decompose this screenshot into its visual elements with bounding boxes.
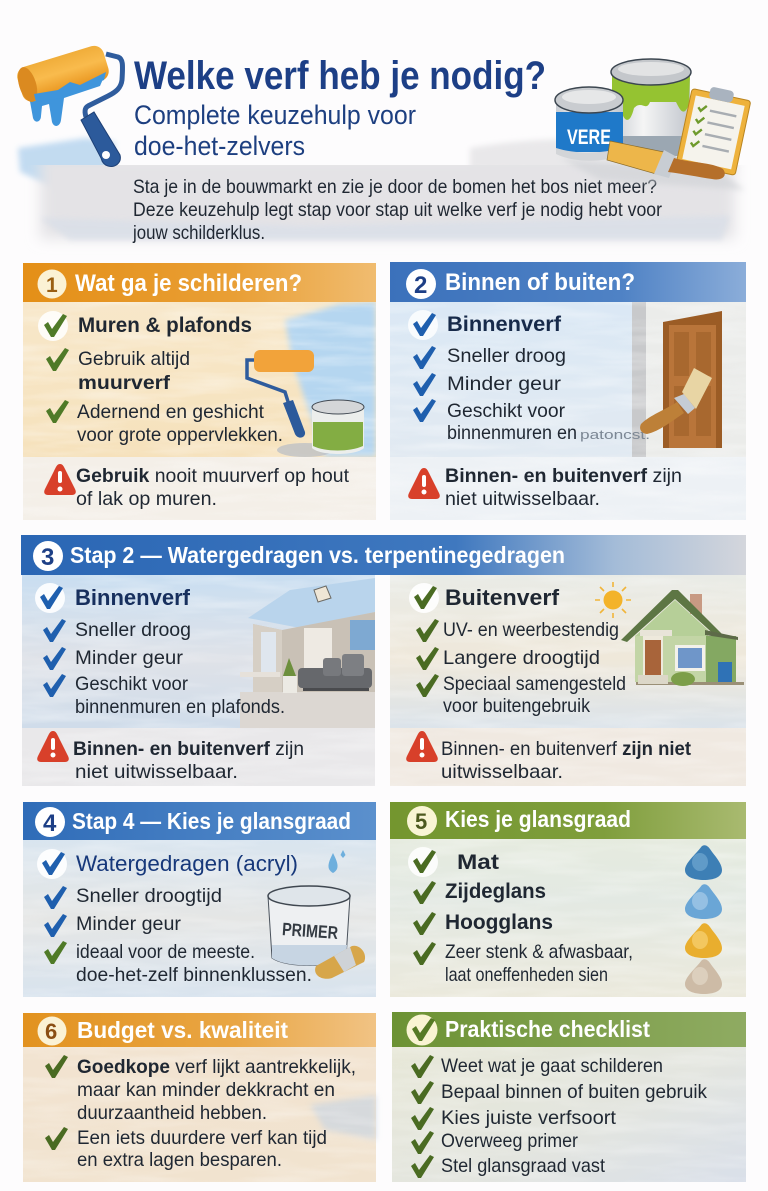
icon: primer can: PRIMER [281, 919, 339, 943]
panel 6: budget vs kwaliteit [23, 1013, 376, 1182]
list: maar kan minder dekkracht en [77, 1079, 335, 1101]
subtitle: Complete keuzehulp voor [134, 100, 416, 130]
title: Welke verf heb je nodig? [134, 54, 546, 98]
icon: gloss drops [685, 845, 722, 994]
column: binnenverf [22, 575, 375, 786]
checklist: Stel glansgraad vast [441, 1155, 606, 1177]
list: Mat [457, 851, 499, 874]
list: Watergedragen (acryl) [76, 851, 298, 876]
header bar [23, 263, 376, 302]
icon: paint cans, brush and clipboard [555, 59, 752, 190]
brush [607, 141, 725, 179]
warning: Binnen- en buitenverf zijn niet [441, 738, 691, 760]
list: binnenverf [408, 310, 650, 444]
header bar: Binnen of buiten? [445, 269, 635, 296]
list: Minder geur [75, 647, 184, 669]
list: muren en plafonds: muurverf [78, 372, 171, 394]
list: duurzaantheid hebben. [77, 1102, 267, 1124]
green can [611, 59, 691, 156]
intro text [132, 176, 662, 244]
list: ideaal voor de meeste. [76, 941, 255, 963]
list: muren en plafonds: voor grote oppervlekken. [77, 424, 283, 446]
list: muren en plafonds: Gebruik altijd [78, 348, 190, 370]
list [408, 847, 633, 986]
checklist: Kies juiste verfsoort [441, 1107, 617, 1129]
header bar: Budget vs. kwaliteit [77, 1017, 288, 1043]
header bar: Stap 4 — Kies je glansgraad [72, 808, 351, 834]
list: Geschikt voor [75, 673, 188, 695]
header bar: 4 [43, 810, 57, 837]
header: title and intro [18, 54, 740, 244]
illustration: living room [240, 578, 375, 728]
list [35, 583, 285, 718]
subtitle: doe-het-zelvers [134, 131, 305, 161]
icon: paint roller [14, 43, 123, 166]
icon: primer can [268, 850, 365, 979]
intro text: Deze keuzehulp legt stap voor stap uit welke verf je nodig hebt voor [133, 199, 662, 221]
list: en extra lagen besparen. [77, 1149, 282, 1171]
list: muren en plafonds [38, 311, 283, 446]
warning [408, 465, 682, 510]
intro text: Sta je in de bouwmarkt en zie je door de bomen het bos niet meer? [133, 176, 657, 198]
header bar: 1 [46, 274, 58, 297]
warning: Binnen- en buitenverf zijn [73, 738, 304, 760]
checklist: Overweeg primer [441, 1130, 578, 1152]
list: binnenverf: Sneller droog [447, 345, 566, 367]
blue can [555, 87, 623, 161]
list: binnenmuren en plafonds. [75, 696, 285, 718]
header bar: Stap 2 — Watergedragen vs. terpentinegedragen [70, 542, 565, 568]
list: Zeer stenk & afwasbaar, [445, 941, 633, 963]
list: Een iets duurdere verf kan tijd [77, 1127, 327, 1149]
panel 5: kies je glansgraad [390, 802, 746, 997]
clipboard [676, 83, 752, 175]
list [45, 1055, 356, 1171]
header bar [390, 802, 746, 839]
list: Sneller droog [75, 619, 191, 641]
warning: niet uitwisselbaar. [445, 488, 600, 510]
checklist: Weet wat je gaat schilderen [441, 1055, 663, 1077]
header bar: 2 [414, 272, 427, 299]
list: Buitenverf [445, 585, 560, 610]
header bar: 6 [45, 1019, 57, 1044]
header bar [23, 802, 376, 840]
checklist [411, 1055, 707, 1178]
list [409, 583, 626, 717]
warning [37, 731, 304, 783]
list: binnenverf: Geschikt voor [447, 400, 565, 422]
warning: niet uitwisselbaar. [75, 761, 238, 783]
list: Binnenverf [75, 585, 191, 610]
icon: roller and green can [247, 350, 364, 457]
header bar: 5 [415, 809, 427, 834]
warning: Binnen- en buitenverf zijn [445, 465, 682, 487]
list: binnenverf: patoncst. [580, 427, 650, 442]
list: Goedkope verf lijkt aantrekkelijk, [77, 1056, 356, 1078]
panel 7: praktische checklist [392, 1012, 746, 1182]
list: muren en plafonds: Adernend en geshicht [77, 401, 265, 423]
list: Langere droogtijd [443, 647, 600, 669]
panel 2: binnen of buiten [390, 262, 746, 520]
list: Hoogglans [445, 911, 553, 934]
list: Zijdeglans [445, 880, 546, 903]
header bar [392, 1012, 746, 1047]
list: doe-het-zelf binnenklussen. [76, 964, 312, 986]
warning: Gebruik nooit muurverf op hout [76, 465, 350, 487]
header bar [23, 1013, 376, 1047]
list: Minder geur [76, 913, 181, 935]
intro text: jouw schilderklus. [132, 222, 265, 244]
subtitle [134, 100, 416, 161]
list: muren en plafonds: Muren & plafonds [78, 314, 252, 337]
illustration: house and sun [595, 582, 744, 686]
header bar: Praktische checklist [445, 1016, 650, 1042]
list: binnenverf: binnenmuren en [447, 422, 577, 444]
list: Sneller droogtijd [76, 885, 222, 907]
panel 3: watergedragen vs terpentinegedragen [21, 535, 746, 786]
list: UV- en weerbestendig [443, 619, 619, 641]
list: binnenverf: Binnenverf [447, 313, 562, 336]
panel 4: stap 4 watergedragen [23, 802, 376, 997]
header bar [21, 535, 746, 575]
warning [44, 464, 350, 510]
blue can: VERE [567, 126, 611, 149]
list: binnenverf: Minder geur [447, 373, 562, 395]
header bar: 3 [41, 544, 54, 571]
column: buitenverf [390, 575, 746, 786]
header bar: Wat ga je schilderen? [75, 270, 302, 297]
header bar [390, 262, 746, 302]
panel 1: wat ga je schilderen [23, 263, 376, 520]
warning: of lak op muren. [76, 488, 217, 510]
header bar: Kies je glansgraad [445, 806, 631, 832]
warning: uitwisselbaar. [441, 761, 563, 783]
warning [406, 731, 691, 783]
list: voor buitengebruik [443, 695, 590, 717]
icon: door and brush [640, 311, 722, 448]
checklist: Bepaal binnen of buiten gebruik [441, 1081, 707, 1103]
list [37, 849, 312, 986]
list: Speciaal samengesteld [443, 673, 626, 695]
list: laat oneffenheden sien [445, 964, 608, 986]
